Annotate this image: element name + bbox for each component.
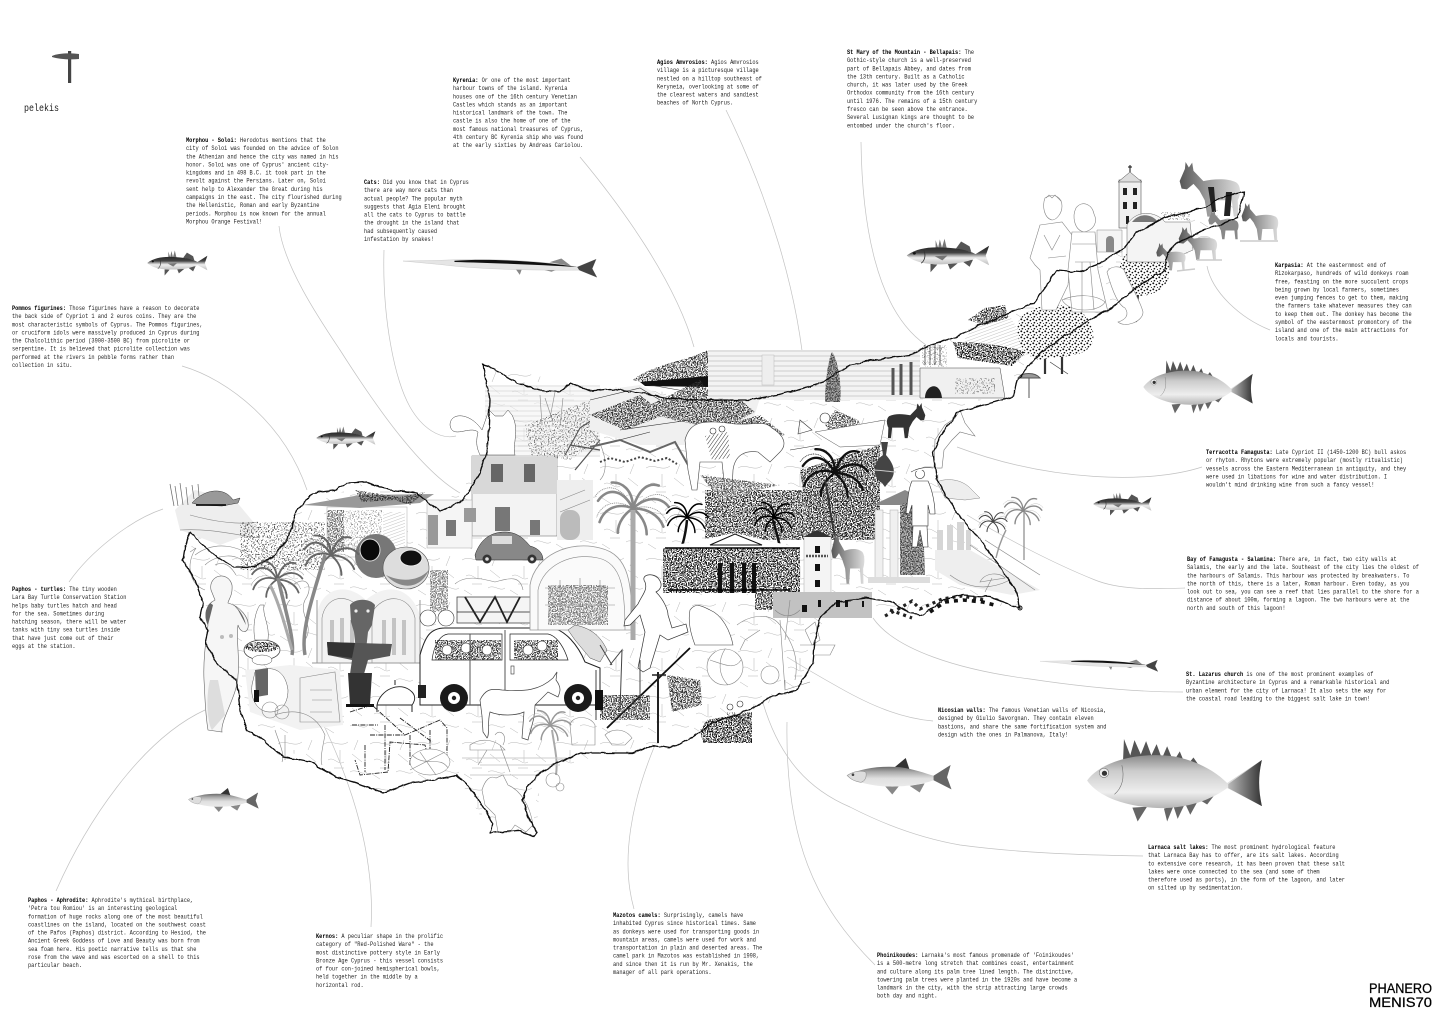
text: Pommos figurines: collection in situ. bbox=[12, 362, 72, 369]
text: Bay of Famagusta - Salamina: north and south of this lagoon! bbox=[1187, 604, 1286, 612]
text: Phoinikoudes: landmark in the city, with the strip attracting large crowds bbox=[877, 984, 1068, 992]
illustration: north mountains bbox=[590, 350, 785, 465]
text: Cats: infestation by snakes! bbox=[364, 236, 434, 243]
text: Karpasia: island and one of the main attractions for bbox=[1275, 327, 1408, 334]
text: Nicosian walls: Nicosian walls: The famous Venetian walls of Nicosia, bbox=[938, 707, 1106, 714]
illustration: palm trees west bbox=[250, 535, 360, 655]
text: Morphou - Soloi: the Hellenistic, Roman and early Byzantine bbox=[186, 202, 320, 209]
text: Karpasia: being grown by local farmers, sometimes bbox=[1275, 286, 1399, 294]
illustration: Pommos cruciform idol bbox=[327, 600, 392, 707]
fish: needlefish top bbox=[403, 259, 597, 277]
text: Phoinikoudes: is a 500-metre long stretch that combines coast, entertainment bbox=[877, 960, 1074, 967]
text: Larnaca salt lakes: Larnaca salt lakes: The most prominent hydrological feature bbox=[1148, 844, 1335, 851]
text: Phoinikoudes: towering palm trees were planted in the 1920s and have become a bbox=[877, 976, 1078, 984]
Cyprus coastline outline bbox=[183, 192, 1244, 837]
text: Morphou - Soloi: the Athenian and hence the city was named in his bbox=[186, 153, 339, 160]
illustration: ruins and chapel, west bbox=[245, 665, 343, 765]
text: Larnaca salt lakes: on silted up by sedimentation. bbox=[1148, 884, 1243, 892]
text: Agios Amvrosios: Agios Amvrosios: Agios Amvrosios bbox=[657, 59, 759, 66]
fish: roach south bbox=[846, 758, 952, 794]
text: Paphos - Aphrodite: Ancient Greek Goddess of Love and Beauty was born from bbox=[28, 937, 200, 945]
illustration: van full of passengers bbox=[418, 628, 600, 712]
text: Kyrenia: houses one of the 16th century Venetian bbox=[453, 93, 577, 100]
text: Mazotos camels: transportation in plain and deserted areas. The bbox=[613, 944, 763, 952]
illustration: domed church bbox=[350, 680, 450, 775]
text: Kernos: held together in the middle by a bbox=[316, 973, 418, 981]
illustration: hillside with cat bbox=[450, 385, 600, 470]
text: Kernos: horizontal rod. bbox=[316, 981, 364, 989]
text: Paphos turtles: eggs at the station. bbox=[12, 643, 76, 650]
illustration: apple tree south panhandle bbox=[1017, 305, 1093, 374]
text: Terracotta Famagusta: were used in libations for wine and water distribution. I bbox=[1206, 473, 1387, 481]
text: Karpasia: Rizokarpaso, hundreds of wild donkeys roam bbox=[1275, 270, 1409, 277]
text: Pommos figurines: Pommos figurines: Those figurines have a reason to decorate bbox=[12, 305, 199, 312]
fish: bass north bbox=[907, 239, 989, 272]
fish: bass east bbox=[1093, 492, 1151, 516]
illustration: south coast beach scene bbox=[462, 711, 595, 791]
text: Paphos turtles: hatching season, there will be water bbox=[12, 618, 126, 626]
illustration: coastal promenade with palms bbox=[935, 480, 1043, 595]
text: Paphos - Aphrodite: 'Petra tou Romiou' is an interesting geological bbox=[28, 905, 178, 912]
text: Larnaca salt lakes: that Larnaca Bay has to offer, are its salt lakes. According bbox=[1148, 852, 1339, 859]
text: Kernos: category of "Red-Polished Ware" - the bbox=[316, 941, 434, 948]
text: Terracotta Famagusta: vessels across the Eastern Mediterranean in antiquity, and they bbox=[1206, 465, 1407, 472]
text: Mazotos camels: Mazotos camels: Surprisingly, camels have bbox=[613, 912, 743, 919]
text: Karpasia: locals and tourists. bbox=[1275, 335, 1339, 343]
text: Kyrenia: at the early sixties by Andreas Cariolou. bbox=[453, 142, 583, 149]
text: Mazotos camels: as donkeys were used for transporting goods in bbox=[613, 928, 759, 935]
fish: bass near west coast bbox=[316, 426, 375, 450]
text: Karpasia: symbol of the easternmost promontory of the bbox=[1275, 319, 1412, 326]
text: Morphou - Soloi: kingdoms and in 498 B.C. it took part in the bbox=[186, 169, 326, 177]
illustration: sea and tower band bbox=[708, 350, 923, 402]
text: Bay of Famagusta - Salamina: Bay of Famagusta - Salamina: There are, in fact, two city walls at bbox=[1187, 556, 1397, 563]
logo: Phaneromenis70: PHANERO bbox=[1369, 981, 1432, 996]
text: St. Lazarus church: the coastal road leading to the biggest salt lake in town! bbox=[1186, 695, 1370, 703]
text: Kernos: most distinctive pottery style in Early bbox=[316, 949, 440, 956]
illustration: town houses and car bbox=[427, 456, 593, 564]
text: Larnaca salt lakes: to extensive core research, it has been proven that these salt bbox=[1148, 860, 1345, 867]
text: Terracotta Famagusta: or rhyton. Rhytons were extremely popular (mostly ritualistic) bbox=[1206, 457, 1403, 464]
text: Agios Amvrosios: village is a picturesque village bbox=[657, 67, 759, 74]
illustration: large palm central bbox=[560, 430, 671, 640]
text: Bay of Famagusta - Salamina: distance of about 100m, forming a lagoon. The two harbours were at the bbox=[1187, 596, 1410, 604]
illustration: luggage roof rack and cats bbox=[420, 570, 532, 626]
fish: large rabbitfish bbox=[1087, 739, 1262, 821]
text: Terracotta Famagusta: Terracotta Famagusta: Late Cypriot II (1450-1200 BC) bull askos bbox=[1206, 449, 1406, 456]
text: Paphos turtles: that have just come out of their bbox=[12, 634, 114, 642]
illustration: stippled figures on dark ground bbox=[700, 701, 752, 743]
text: Pommos figurines: performed at the rivers in pebble forms rather than bbox=[12, 353, 174, 361]
illustration: Aphrodite statue bbox=[190, 548, 248, 732]
text: Paphos turtles: Lara Bay Turtle Conservation Station bbox=[12, 594, 126, 601]
text: St. Lazarus church: urban element for the city of Larnaca! It also sets the way for bbox=[1186, 687, 1386, 694]
text: Mazotos camels: mountain areas, camels were used for work and bbox=[613, 936, 756, 944]
illustration: diagonal post and south plants bbox=[595, 645, 702, 745]
text: Cats: actual people? The popular myth bbox=[364, 195, 463, 202]
text: Paphos - Aphrodite: of the Pafos (Paphos) district. According to Hesiod, the bbox=[28, 929, 206, 937]
text: Mazotos camels: inhabited Cyprus since historical times. Same bbox=[613, 920, 756, 927]
illustration: bird outline bbox=[1107, 267, 1143, 324]
text: Larnaca salt lakes: therefore used as ports), in the form of the lagoon, and later bbox=[1148, 876, 1345, 884]
text: Nicosian walls: designed by Giulio Savorgnan. They contain eleven bbox=[938, 715, 1094, 722]
logo: Phaneromenis70: MENIS70 bbox=[1369, 995, 1432, 1010]
illustration: soldier outline bbox=[906, 468, 935, 547]
text: Larnaca salt lakes: lakes were once connected to the sea (and some of them bbox=[1148, 868, 1320, 876]
illustration: colonial courthouse bbox=[663, 533, 800, 610]
text: St Mary of the Mountain: until 1976. The remains of a 15th century bbox=[847, 97, 978, 105]
text: Karpasia: to keep them out. The donkey has become the bbox=[1275, 310, 1412, 318]
text: Agios Amvrosios: nestled on a hilltop southeast of bbox=[657, 75, 762, 82]
illustration: kernos vessel bbox=[244, 581, 309, 665]
text: Kyrenia: harbour towns of the island. Kyrenia bbox=[453, 85, 568, 92]
fish: roach south west bbox=[188, 788, 259, 812]
island sketch texture bbox=[190, 192, 1244, 833]
illustration: west coast turtle and bushes bbox=[170, 483, 325, 570]
illustration: child and cat bbox=[624, 575, 733, 672]
text: St Mary of the Mountain: entombed under the church's floor. bbox=[847, 122, 955, 130]
text: Paphos - Aphrodite: formation of huge rocks along one of the most beautiful bbox=[28, 913, 203, 920]
text: Paphos - Aphrodite: coastlines on the island, located on the southwest coast bbox=[28, 921, 206, 929]
text: St Mary of the Mountain: fresco can be seen above the entrance. bbox=[847, 106, 968, 113]
text: Pommos figurines: or cruciform idols were massively produced in Cyprus during bbox=[12, 329, 199, 337]
text: Paphos turtles: for the sea. Sometimes during bbox=[12, 610, 104, 618]
logo: Phaneromenis70 bbox=[1369, 981, 1432, 1010]
illustration: cat on south peninsula bbox=[482, 775, 533, 832]
illustration: terracotta vase bbox=[873, 442, 896, 487]
text: Mazotos camels: camel park in Mazotos was established in 1998, bbox=[613, 952, 759, 960]
leader lines bbox=[56, 110, 1270, 965]
text: Kernos: of four con-joined hemispherical bowls, bbox=[316, 965, 440, 973]
text: Nicosian walls: design with the ones in Palmanova, Italy! bbox=[938, 731, 1068, 739]
illustration: east donkey outline bbox=[934, 410, 975, 468]
text: Pommos figurines: serpentine. It is believed that picrolite collection was bbox=[12, 345, 190, 353]
illustration: apple tree north panhandle bbox=[1120, 247, 1169, 322]
text: Kernos: Kernos: A peculiar shape in the prolific bbox=[316, 933, 443, 940]
icon: pelekis axe bbox=[52, 51, 79, 83]
text: Phoinikoudes: Phoinikoudes: Larnaka's most famous promenade of 'Foinikoudes' bbox=[877, 952, 1074, 959]
fish: bass top left bbox=[147, 251, 207, 275]
text: St. Lazarus church: St. Lazarus church is one of the most prominent examples of bbox=[1186, 671, 1373, 678]
fish: small rabbitfish bbox=[1143, 360, 1253, 413]
illustration: dark vineyard and rocky hill bbox=[953, 305, 1040, 398]
illustration: couple in traditional dress bbox=[1030, 195, 1108, 312]
illustration: seated figure and market bbox=[790, 410, 885, 450]
text: St Mary of the Mountain: part of Bellapais Abbey, and dates from bbox=[847, 65, 971, 72]
text: St Mary of the Mountain: Several Lusignan kings are thought to be bbox=[847, 114, 975, 121]
text: Mazotos camels: manager of all park operations. bbox=[613, 969, 712, 976]
text: Agios Amvrosios: Keryneia, overlooking at some of bbox=[657, 83, 759, 91]
text: Pommos figurines: the back side of Cypriot 1 and 2 euros coins. They are the bbox=[12, 313, 197, 320]
text: Kyrenia: most famous national treasures of Cyprus, bbox=[453, 125, 583, 133]
text: Karpasia: free, feasting on the more succulent crops bbox=[1275, 278, 1409, 285]
text: Paphos - Aphrodite: rose from the wave and was escorted on a shell to this bbox=[28, 954, 200, 961]
illustration: wall and coastal plants bbox=[773, 592, 1022, 618]
text: Paphos turtles: Paphos - turtles: The tiny wooden bbox=[12, 586, 117, 593]
illustration: St Lazarus tower bbox=[803, 530, 832, 595]
text: Cats: suggests that Agia Eleni brought bbox=[364, 203, 466, 211]
text: Karpasia: even jumping fences to get to them, making bbox=[1275, 294, 1408, 302]
text: Agios Amvrosios: beaches of North Cyprus. bbox=[657, 99, 733, 107]
text: Morphou - Soloi: revolt against the Persians. Later on, Soloi bbox=[186, 177, 326, 185]
text: Nicosian walls: bastions, and share the same fortification system and bbox=[938, 723, 1106, 730]
text: St Mary of the Mountain: St Mary of the Mountain - Bellapais: The bbox=[847, 49, 974, 56]
text: St Mary of the Mountain: Orthodox community from the 16th century bbox=[847, 89, 975, 97]
text: Kyrenia: historical landmark of the town. The bbox=[453, 109, 568, 117]
caption: pelekis: pelekis bbox=[24, 102, 59, 114]
text: Karpasia: the farmers take whatever measures they can bbox=[1275, 302, 1412, 310]
text: Morphou - Soloi: sent help to Alexander the Great during his bbox=[186, 185, 323, 193]
illustration: dark donkey bbox=[887, 403, 925, 438]
text: Bay of Famagusta - Salamina: Salamis, the early and the late. Southeast of the city lies the oldest of bbox=[1187, 564, 1419, 571]
illustration: taverna house bbox=[303, 490, 434, 557]
illustration: white donkey with basket bbox=[685, 422, 784, 490]
text: Terracotta Famagusta: wouldn't mind drinking wine from such a fancy vessel! bbox=[1206, 481, 1374, 489]
text: Phoinikoudes: and culture along its palm tree lined length. The distinctive, bbox=[877, 968, 1074, 975]
text: Cats: all the cats to Cyprus to battle bbox=[364, 211, 466, 219]
fish: small needlefish bbox=[1040, 660, 1158, 672]
text: Kyrenia: Kyrenia: Or one of the most important bbox=[453, 77, 571, 84]
illustration: Greek temple ruin bbox=[868, 490, 930, 583]
illustration: chicken bbox=[568, 625, 607, 662]
text: Paphos - Aphrodite: particular beach. bbox=[28, 962, 82, 969]
text: Paphos - Aphrodite: sea foam here. His poetic narrative tells us that she bbox=[28, 945, 197, 953]
text: Phoinikoudes: both day and night. bbox=[877, 992, 937, 1000]
illustration: donkeys of Karpasia bbox=[1156, 162, 1278, 271]
text: Morphou - Soloi: city of Soloi was founded on the advice of Solon bbox=[186, 145, 339, 152]
text: Morphou - Soloi: Morphou Orange Festival! bbox=[186, 218, 262, 226]
text: Morphou - Soloi: periods. Morphou is now known for the annual bbox=[186, 210, 326, 218]
text: St Mary of the Mountain: the 13th century. Built as a Catholic bbox=[847, 73, 965, 81]
text: Morphou - Soloi: campaigns in the east. The city flourished during bbox=[186, 194, 342, 201]
text: Paphos - Aphrodite: Paphos - Aphrodite: Aphrodite's mythical birthplace, bbox=[28, 897, 193, 904]
text: Agios Amvrosios: the clearest waters and sandiest bbox=[657, 91, 759, 99]
text: Kyrenia: Castles which stands as an important bbox=[453, 101, 567, 109]
illustration: bell tower and church bbox=[1097, 165, 1193, 262]
text: Mazotos camels: and since then it is run by Mr. Xenakis, the bbox=[613, 960, 753, 968]
text: Bay of Famagusta - Salamina: the north of this, there is a later, Roman harbour. Even today, as you bbox=[1187, 580, 1409, 588]
text: Morphou - Soloi: honor. Soloi was one of Cyprus' ancient city- bbox=[186, 161, 329, 169]
illustration: beach ball and toys bbox=[707, 600, 835, 690]
text: Kernos: Bronze Age Cyprus - this vessel consists bbox=[316, 957, 444, 965]
text: Cats: the drought in the island that bbox=[364, 219, 459, 227]
text: St Mary of the Mountain: church, it was later used by the Greek bbox=[847, 81, 968, 89]
text: Morphou - Soloi: Morphou - Soloi: Herodotus mentions that the bbox=[186, 137, 326, 144]
text: Bay of Famagusta - Salamina: look out to sea, you can see a reef that lies parallel to the shore for a bbox=[1187, 588, 1419, 596]
text: St Mary of the Mountain: Gothic-style church is a well-preserved bbox=[847, 57, 971, 64]
illustration: ornate arch building bbox=[530, 546, 632, 630]
text: Paphos turtles: helps baby turtles hatch and head bbox=[12, 602, 117, 609]
illustration: white horse bbox=[480, 672, 560, 740]
text: Karpasia: Karpasia: At the easternmost end of bbox=[1275, 262, 1386, 269]
illustration: pottery jars bbox=[355, 534, 429, 589]
text: Cats: there are way more cats than bbox=[364, 187, 453, 194]
illustration: gothic arches bbox=[312, 589, 428, 663]
text: Pommos figurines: most characteristic symbols of Cyprus. The Pommos figurines, bbox=[12, 321, 203, 328]
text: Kyrenia: castle is also the home of one of the bbox=[453, 117, 571, 125]
text: Cats: Cats: Did you know that in Cyprus bbox=[364, 179, 469, 186]
illustration: Kyrenia castle on hill bbox=[920, 345, 1005, 398]
text: Paphos turtles: tanks with tiny sea turtles inside bbox=[12, 626, 120, 634]
text: St. Lazarus church: Byzantine architecture in Cyprus and a remarkable historical and bbox=[1186, 679, 1389, 686]
text: Pommos figurines: the Chalcolithic period (3900-3500 BC) from picrolite or bbox=[12, 337, 190, 345]
illustration: stippled palm grove bbox=[665, 445, 880, 590]
text: Kyrenia: 4th century BC Kyrenia ship who was found bbox=[453, 134, 583, 141]
text: Cats: had subsequently caused bbox=[364, 227, 437, 235]
text: Bay of Famagusta - Salamina: the harbours of Salamis. This harbour was protected by breakwaters. To bbox=[1187, 572, 1410, 579]
illustration: grey donkey bbox=[831, 533, 864, 584]
